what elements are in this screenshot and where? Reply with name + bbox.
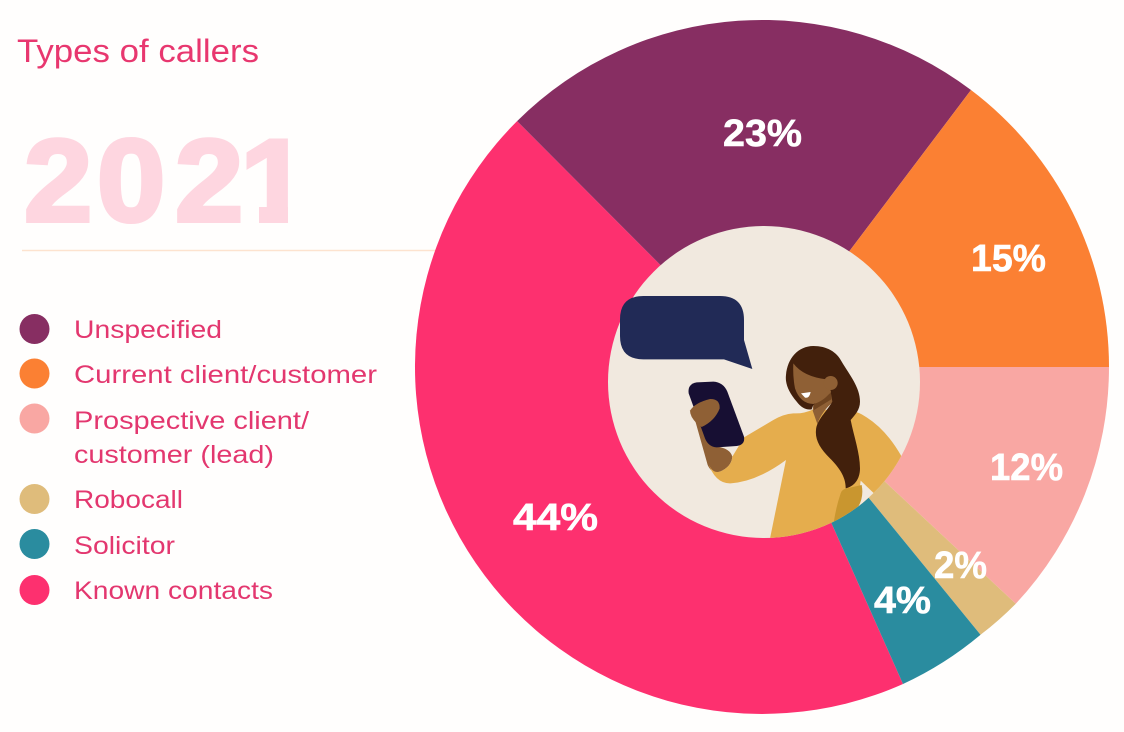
legend item: solicitor [20, 529, 175, 560]
label: 4%: 4% [874, 580, 931, 622]
legend item: prospective client/customer (lead): customer (lead) [74, 441, 274, 469]
year heading: 2021 [24, 116, 309, 246]
legend item: current client/customer [20, 358, 377, 389]
phone [688, 382, 744, 447]
label: 2%: 2% [934, 545, 987, 587]
sweater [709, 410, 902, 538]
legend item: prospective client/customer (lead) [20, 404, 309, 469]
legend item: known contacts [20, 575, 273, 605]
label: 12%: 12% [990, 447, 1063, 489]
label: 44%: 44% [513, 497, 598, 539]
label: 23%: 23% [723, 113, 802, 155]
neck [813, 392, 833, 424]
center illustration [608, 226, 920, 547]
icon: woman with phone [688, 346, 902, 538]
icon: speech bubble [620, 296, 752, 369]
hair [786, 346, 860, 488]
legend item: current client/customer: Current client/customer [74, 361, 377, 389]
slice: prospective client 12% [762, 367, 1109, 604]
jaw shadow [813, 393, 831, 410]
title: Types of callers [17, 33, 259, 69]
gap between body and arm [858, 480, 874, 507]
sweater shadow [834, 485, 862, 522]
slice: unspecified 23% [517, 20, 971, 367]
label: 15%: 15% [971, 238, 1046, 280]
center circle [608, 226, 920, 538]
legend item: known contacts: Known contacts [74, 577, 273, 605]
legend item: robocall [20, 484, 183, 514]
face [793, 363, 831, 404]
slice: robocall 2% [762, 367, 1016, 635]
legend item: unspecified [20, 314, 222, 344]
slice: known contacts 44% [415, 121, 903, 714]
donut chart [415, 20, 1109, 714]
hand [690, 399, 720, 427]
legend item: robocall: Robocall [74, 486, 183, 514]
legend item: unspecified: Unspecified [74, 316, 222, 344]
slice: solicitor 4% [762, 367, 980, 684]
slice: current client 15% [762, 90, 1109, 367]
forearm [695, 420, 732, 472]
legend [20, 314, 377, 605]
ear [824, 376, 838, 390]
smile [801, 392, 811, 398]
legend item: prospective client/customer (lead): Prospective client/ [74, 407, 309, 435]
legend item: solicitor: Solicitor [74, 532, 175, 560]
